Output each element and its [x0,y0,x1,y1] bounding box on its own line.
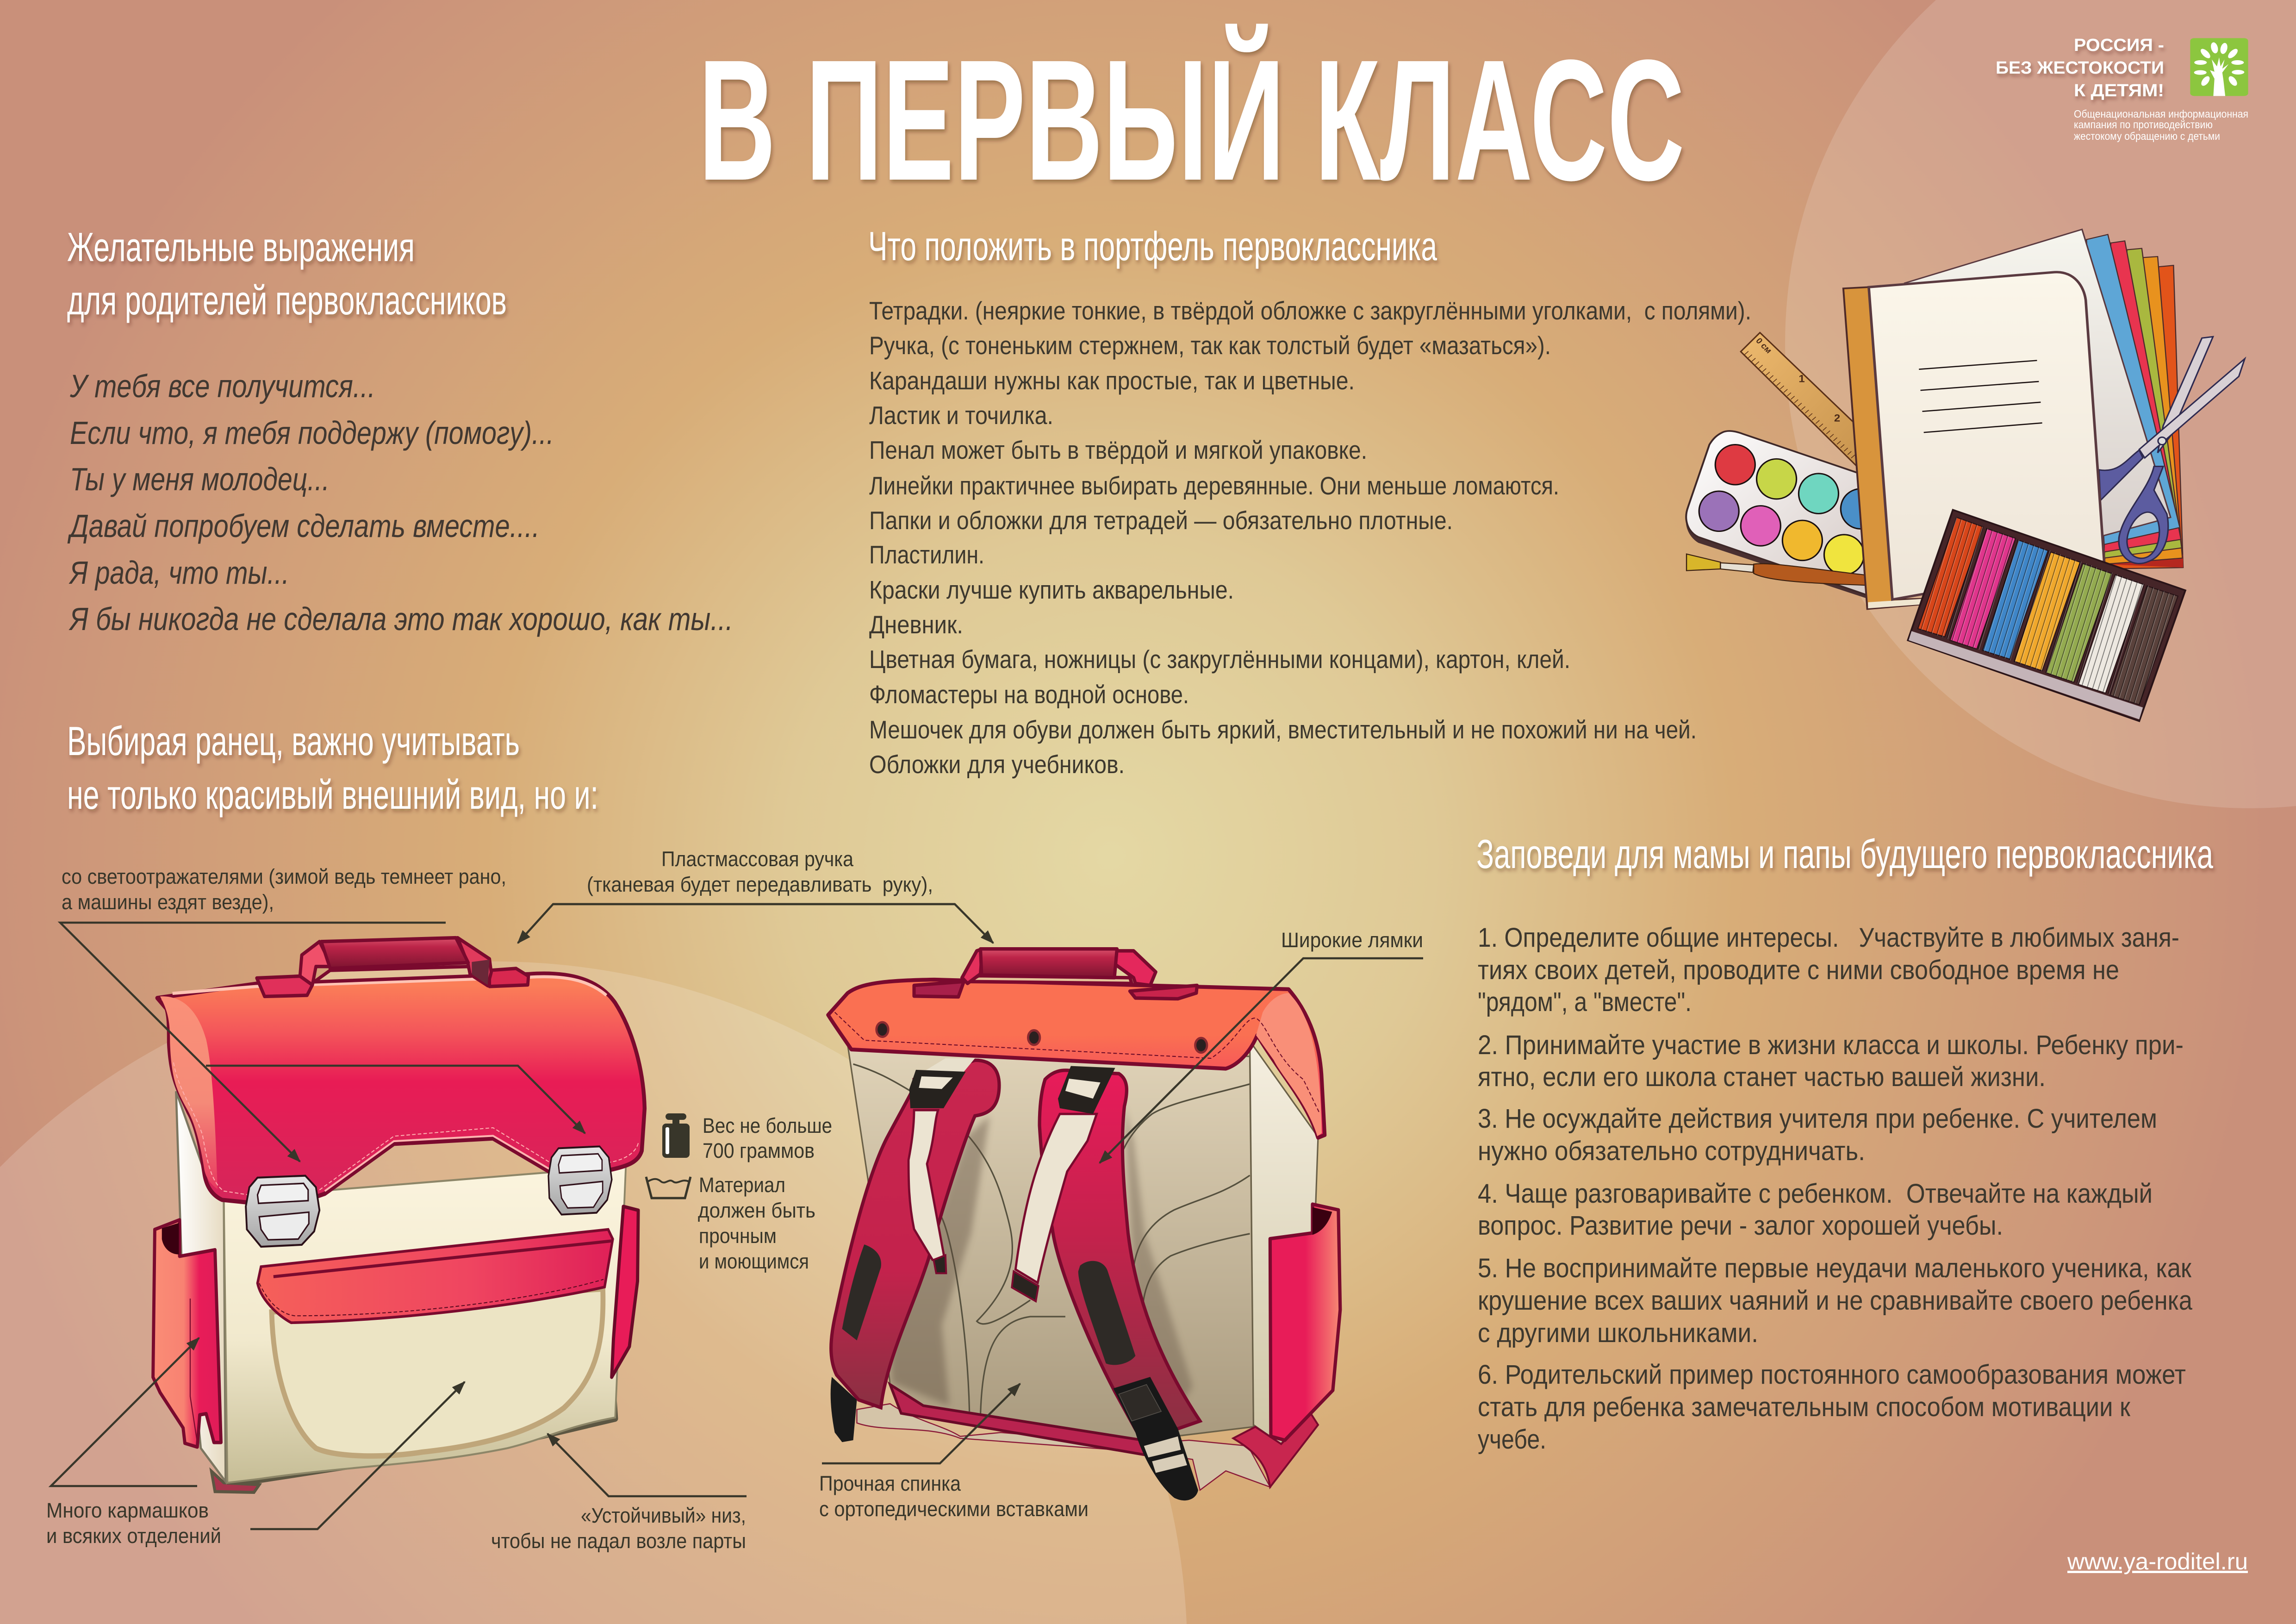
text block: commandments: 3. Не осуждайте действия учителя при ребенке. С учителем [1478,1104,2157,1134]
arrow: back [822,1384,1020,1463]
callout: stable bottom [491,1504,746,1553]
callout: weight [703,1114,832,1162]
text block: what to pack list: Ручка, (с тоненьким стержнем, так как толстый будет «мазаться»). [869,331,1551,360]
text block: what to pack list: Краски лучше купить акварельные. [869,575,1234,604]
text block: commandments: 6. Родительский пример постоянного самообразования может [1478,1360,2186,1390]
text block: commandments: "рядом", а "вместе". [1478,987,1692,1017]
callout: pockets: и всяких отделений [46,1524,221,1548]
icon: weight [662,1113,690,1158]
text block: phrases: Я бы никогда не сделала это так хорошо, как ты... [68,601,733,637]
text block: what to pack list: Обложки для учебников. [869,750,1125,779]
text block: commandments: учебе. [1478,1424,1546,1455]
callout: strong back [819,1472,1089,1521]
heading: choosing a backpack: не только красивый внешний вид, но и: [67,772,598,818]
callout: weight: Вес не больше [703,1114,832,1137]
arrow: handle left [518,904,955,943]
ruler: 2 [1834,412,1840,424]
text block: phrases: Давай попробуем сделать вместе.... [67,508,540,544]
callout: stable bottom: «Устойчивый» низ, [581,1504,746,1527]
strap shadows [890,1116,989,1405]
text block: commandments: 4. Чаще разговаривайте с ребенком. Отвечайте на каждый [1478,1179,2153,1209]
bottom corner [1233,1413,1318,1487]
side pocket [1270,1204,1340,1440]
heading: choosing a backpack [67,718,598,818]
logo title [1996,36,2164,100]
scissors [2119,337,2245,563]
arrow: handle right [553,904,993,943]
ruler [1741,332,1859,466]
logo: Russia without cruelty to children [1996,36,2248,142]
scissors handle behind notebook [2099,450,2143,500]
text block: what to pack list: Дневник. [869,610,963,639]
paint brush [1686,554,1866,585]
foot [212,1471,259,1493]
plasticine box [1908,510,2185,721]
arrow: front pocket [250,1382,465,1529]
illustration: backpack front [153,938,645,1493]
arrow: side pocket [51,1338,199,1486]
text block: what to pack list: Карандаши нужны как простые, так и цветные. [869,366,1355,395]
bottom cloth [857,1404,1270,1490]
arrow: reflector left [60,923,446,1162]
logo caption: Общенациональная информационная [2074,108,2248,120]
arrow: straps [1100,958,1423,1163]
white sheet [1905,229,2171,536]
back handle [914,949,1197,999]
text block: phrases: Я рада, что ты... [68,555,289,591]
front panel [224,1166,626,1483]
icon: green tree hand [2190,38,2248,96]
callout: material: должен быть [698,1199,815,1222]
callout: plastic handle: Пластмассовая ручка [661,847,854,871]
callout: plastic handle: (тканевая будет передавливать руку), [587,873,933,896]
logo caption: жестокому обращению с детьми [2074,130,2220,142]
logo caption [2074,108,2248,142]
icon: wash basin [646,1177,691,1198]
callout: pockets [46,1499,221,1548]
right side pocket [612,1206,638,1377]
text block: what to pack list: Линейки практичнее выбирать деревянные. Они меньше ломаются. [869,471,1559,500]
callout: material: и моющимся [699,1249,809,1273]
ruler: 1 [1798,373,1805,384]
ruler: 0 см [1754,336,1774,355]
illustration: school supplies [1686,229,2245,721]
left buckle [246,1176,319,1247]
main flap [157,974,645,1203]
back panel [848,1045,1253,1440]
side panel [176,1091,225,1481]
callout: strong back: Прочная спинка [819,1472,961,1495]
text block: what to pack list: Тетрадки. (неяркие тонкие, в твёрдой обложке с закруглёнными уголками, с полями). [869,296,1751,325]
text block: commandments [1478,923,2193,1455]
text block: phrases [67,368,733,637]
background circle: bottom left [0,962,1187,1624]
heading: what to pack: Что положить в портфель первоклассника [868,223,1437,269]
text block: commandments: 5. Не воспринимайте первые неудачи маленького ученика, как [1478,1253,2192,1283]
callout: reflectors [62,865,506,914]
heading: desirable phrases: Желательные выражения [67,224,415,270]
text block: what to pack list: Мешочек для обуви должен быть яркий, вместительный и не похожий ни на чей. [869,715,1697,744]
callout: material [698,1173,815,1273]
left side pocket [153,1220,221,1447]
text block: commandments: с другими школьниками. [1478,1318,1758,1348]
callout: stable bottom: чтобы не падал возле парты [491,1529,746,1553]
back panel seams [853,1064,1250,1415]
text block: phrases: Если что, я тебя поддержу (помогу)... [70,415,554,451]
text block: commandments: 2. Принимайте участие в жизни класса и школы. Ребенку при- [1478,1030,2184,1060]
callout: strong back: с ортопедическими вставками [819,1497,1089,1521]
bottom shadow [227,1393,615,1484]
text block: commandments: крушение всех ваших чаяний и не сравнивайте своего ребенка [1478,1286,2193,1316]
title: В ПЕРВЫЙ КЛАСС [698,24,1685,216]
heading: choosing a backpack: Выбирая ранец, важно учитывать [67,718,520,764]
text block: commandments: вопрос. Развитие речи - залог хорошей учебы. [1478,1211,2003,1241]
heading: desirable phrases [67,224,507,323]
bottom rail [890,1385,1145,1455]
callout: material: прочным [699,1224,777,1248]
front pocket [272,1289,603,1456]
arrow: reflector right [206,1066,585,1133]
text block: commandments: 1. Определите общие интересы. Участвуйте в любимых заня- [1478,923,2179,953]
logo caption: кампания по противодействию [2074,119,2213,131]
callout: material: Материал [699,1173,785,1197]
notebook [1843,272,2104,609]
text block: commandments: стать для ребенка замечательным способом мотивации к [1478,1392,2131,1422]
logo title: БЕЗ ЖЕСТОКОСТИ [1996,58,2164,78]
coloured paper fan [2086,234,2183,569]
text block: phrases: У тебя все получится... [69,368,375,404]
callout: pockets: Много кармашков [46,1499,209,1522]
text block: what to pack list: Пенал может быть в твёрдой и мягкой упаковке. [869,436,1367,464]
watercolour palette [1686,431,1880,599]
heading: desirable phrases: для родителей первоклассников [67,277,507,323]
arrow: bottom [548,1434,747,1496]
handle [257,938,529,996]
text block: commandments: нужно обязательно сотрудничать. [1478,1136,1865,1166]
logo title: РОССИЯ - [2074,36,2164,55]
pocket flap [257,1230,613,1323]
arrows: leader lines [51,904,1423,1529]
background circle: top right [1785,0,2296,808]
website link: www.ya-roditel.ru [2067,1549,2248,1574]
callout: weight: 700 граммов [703,1139,815,1162]
text block: what to pack list: Пластилин. [869,540,984,569]
text block: what to pack list: Цветная бумага, ножницы (с закруглёнными концами), картон, клей. [869,645,1570,674]
callout: reflectors: а машины ездят везде), [62,890,274,914]
text block: commandments: ятно, если его школа станет частью вашей жизни. [1478,1062,2046,1092]
logo title: К ДЕТЯМ! [2074,81,2164,100]
text block: commandments: тиях своих детей, проводите с ними свободное время не [1478,955,2119,985]
callout: plastic handle [587,847,933,896]
callout: reflectors: со светоотражателями (зимой ведь темнеет рано, [62,865,506,888]
black strap end right [1114,1377,1198,1500]
text block: phrases: Ты у меня молодец... [70,461,330,497]
text block: what to pack list [869,296,1751,779]
left shoulder strap [831,1058,999,1408]
right buckle [548,1146,612,1215]
top flap [828,980,1325,1138]
callout: wide straps: Широкие лямки [1281,928,1423,952]
text block: what to pack list: Фломастеры на водной основе. [869,680,1189,709]
text block: what to pack list: Папки и обложки для тетрадей — обязательно плотные. [869,506,1453,535]
right shoulder strap [1012,1066,1200,1432]
illustration: backpack back [828,949,1340,1500]
text block: what to pack list: Ластик и точилка. [869,401,1053,430]
side panel [1250,1041,1318,1444]
black strap end left [831,1377,857,1442]
